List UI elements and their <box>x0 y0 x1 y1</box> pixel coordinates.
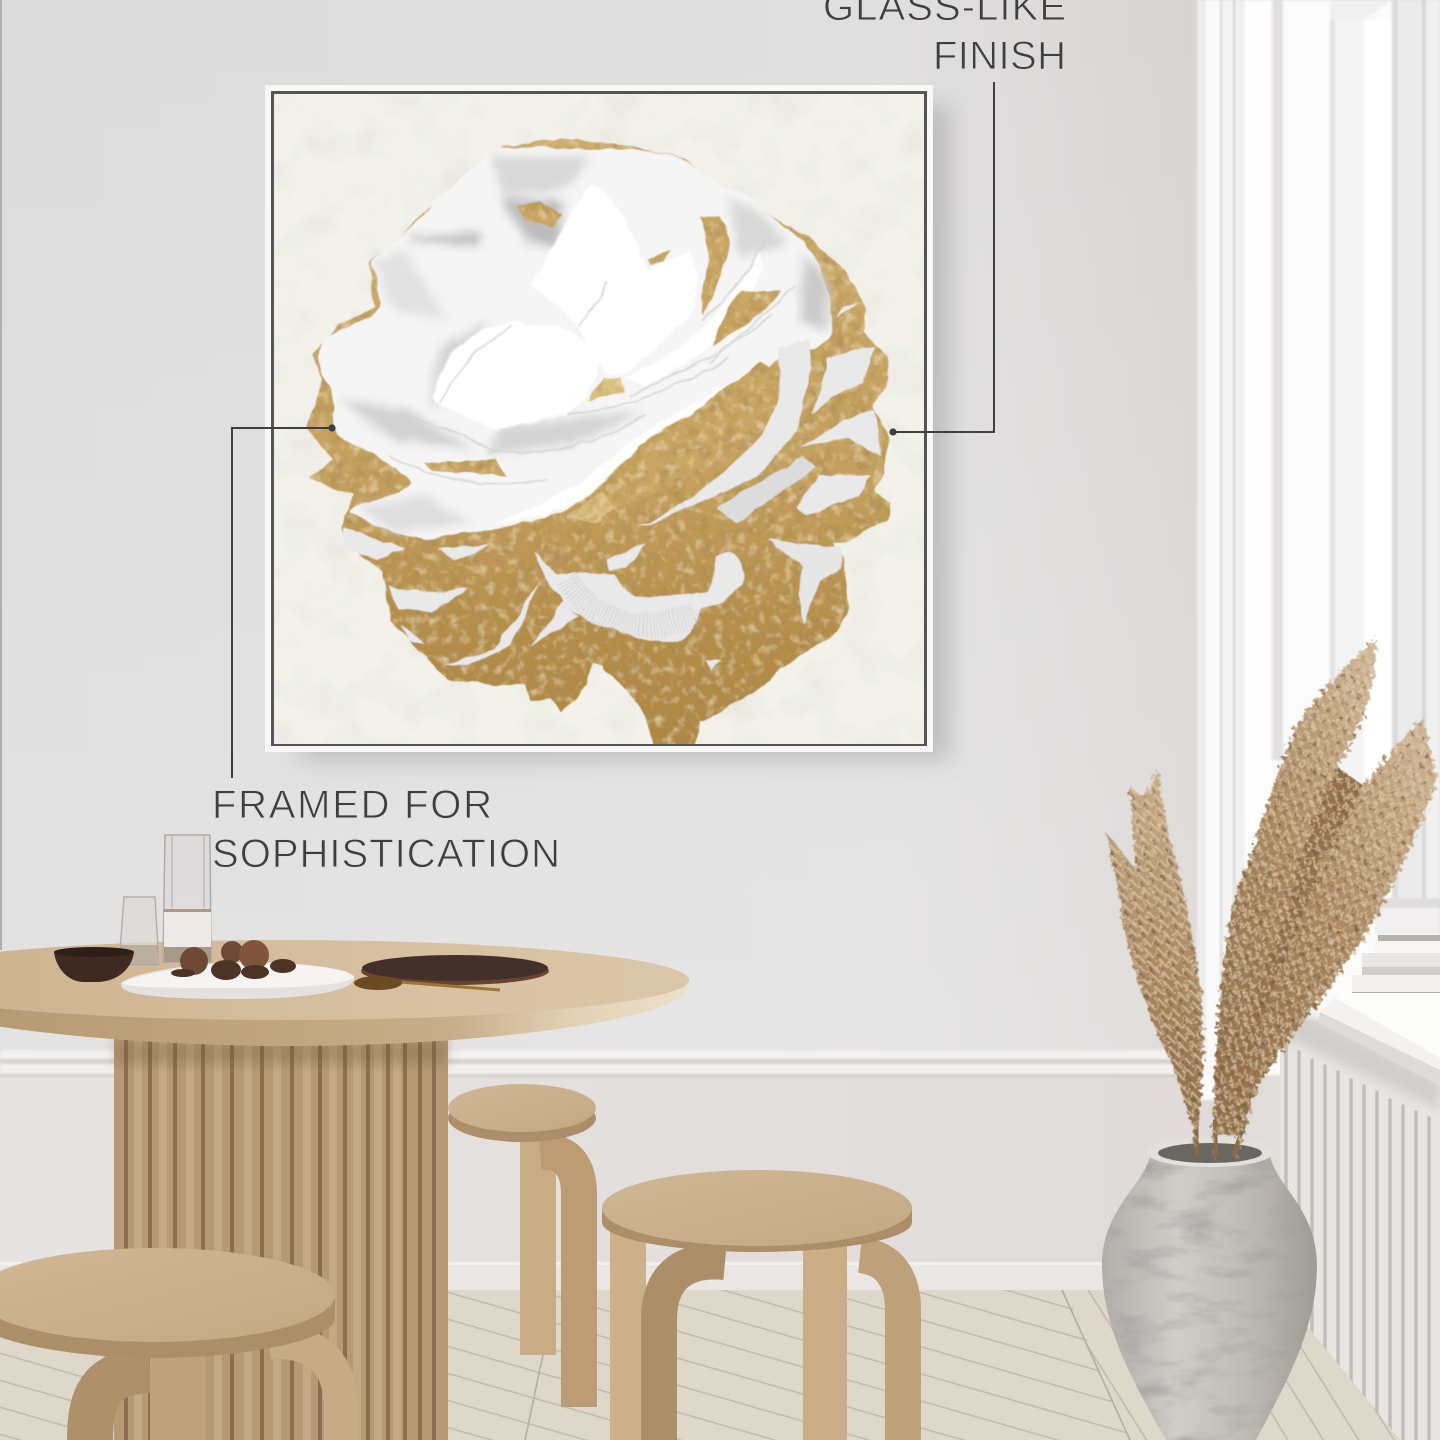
dark bowl <box>54 947 134 982</box>
nuts on board <box>171 940 296 980</box>
dark inner gap <box>271 91 927 746</box>
leader line left <box>232 428 332 778</box>
gold leaf silhouette <box>306 138 891 762</box>
right stool <box>602 1170 912 1440</box>
lower left white patches <box>343 528 721 669</box>
skirting board <box>0 1262 1110 1290</box>
ceramic vase <box>1102 1137 1317 1440</box>
framed artwork <box>265 85 950 762</box>
floor <box>0 1290 1400 1440</box>
round table top <box>0 940 689 1046</box>
callout: glass-like finish <box>823 0 1066 436</box>
white frame <box>265 85 933 752</box>
dot right <box>889 428 897 436</box>
dado rail moulding <box>0 1050 1180 1077</box>
back stool <box>448 1084 596 1407</box>
stems <box>1196 1110 1244 1156</box>
radiator <box>1280 1000 1440 1440</box>
window and trim <box>1197 0 1440 1295</box>
marble board <box>121 962 354 999</box>
window sill <box>1318 993 1440 1086</box>
pampas grass <box>1107 638 1437 1163</box>
lower feathered petal <box>533 552 744 641</box>
petal ridges <box>567 580 697 626</box>
wooden spoon <box>354 976 500 990</box>
dot left <box>328 424 336 432</box>
dense merged lower plume mass <box>1214 754 1392 1135</box>
glass tumbler <box>119 897 159 965</box>
flower <box>306 138 891 762</box>
left plume <box>1107 768 1203 1153</box>
glass carafe <box>163 835 211 962</box>
middle plume <box>1212 638 1377 1158</box>
books on the window sill <box>1352 935 1440 995</box>
bright central petals <box>432 185 762 524</box>
left stool <box>0 1248 341 1440</box>
label left: FRAMED FOR <box>212 783 492 827</box>
wooden plate <box>361 955 549 985</box>
white petals main mass <box>319 147 832 540</box>
right swirl petals <box>638 302 881 528</box>
right plume <box>1236 716 1437 1163</box>
plume group stretched to reference height <box>1107 638 1437 1163</box>
lower right petal <box>768 540 842 624</box>
callout: framed for sophistication <box>212 424 560 876</box>
grey petal shading <box>337 156 828 532</box>
frame shadow <box>300 105 950 760</box>
canvas <box>274 94 924 744</box>
label left: SOPHISTICATION <box>212 832 560 876</box>
gold gaps between petals <box>424 201 780 524</box>
fluted table base <box>114 1030 448 1440</box>
label right: FINISH <box>933 34 1066 78</box>
leader line right <box>893 82 994 432</box>
swirl petal edge lines <box>361 241 796 484</box>
